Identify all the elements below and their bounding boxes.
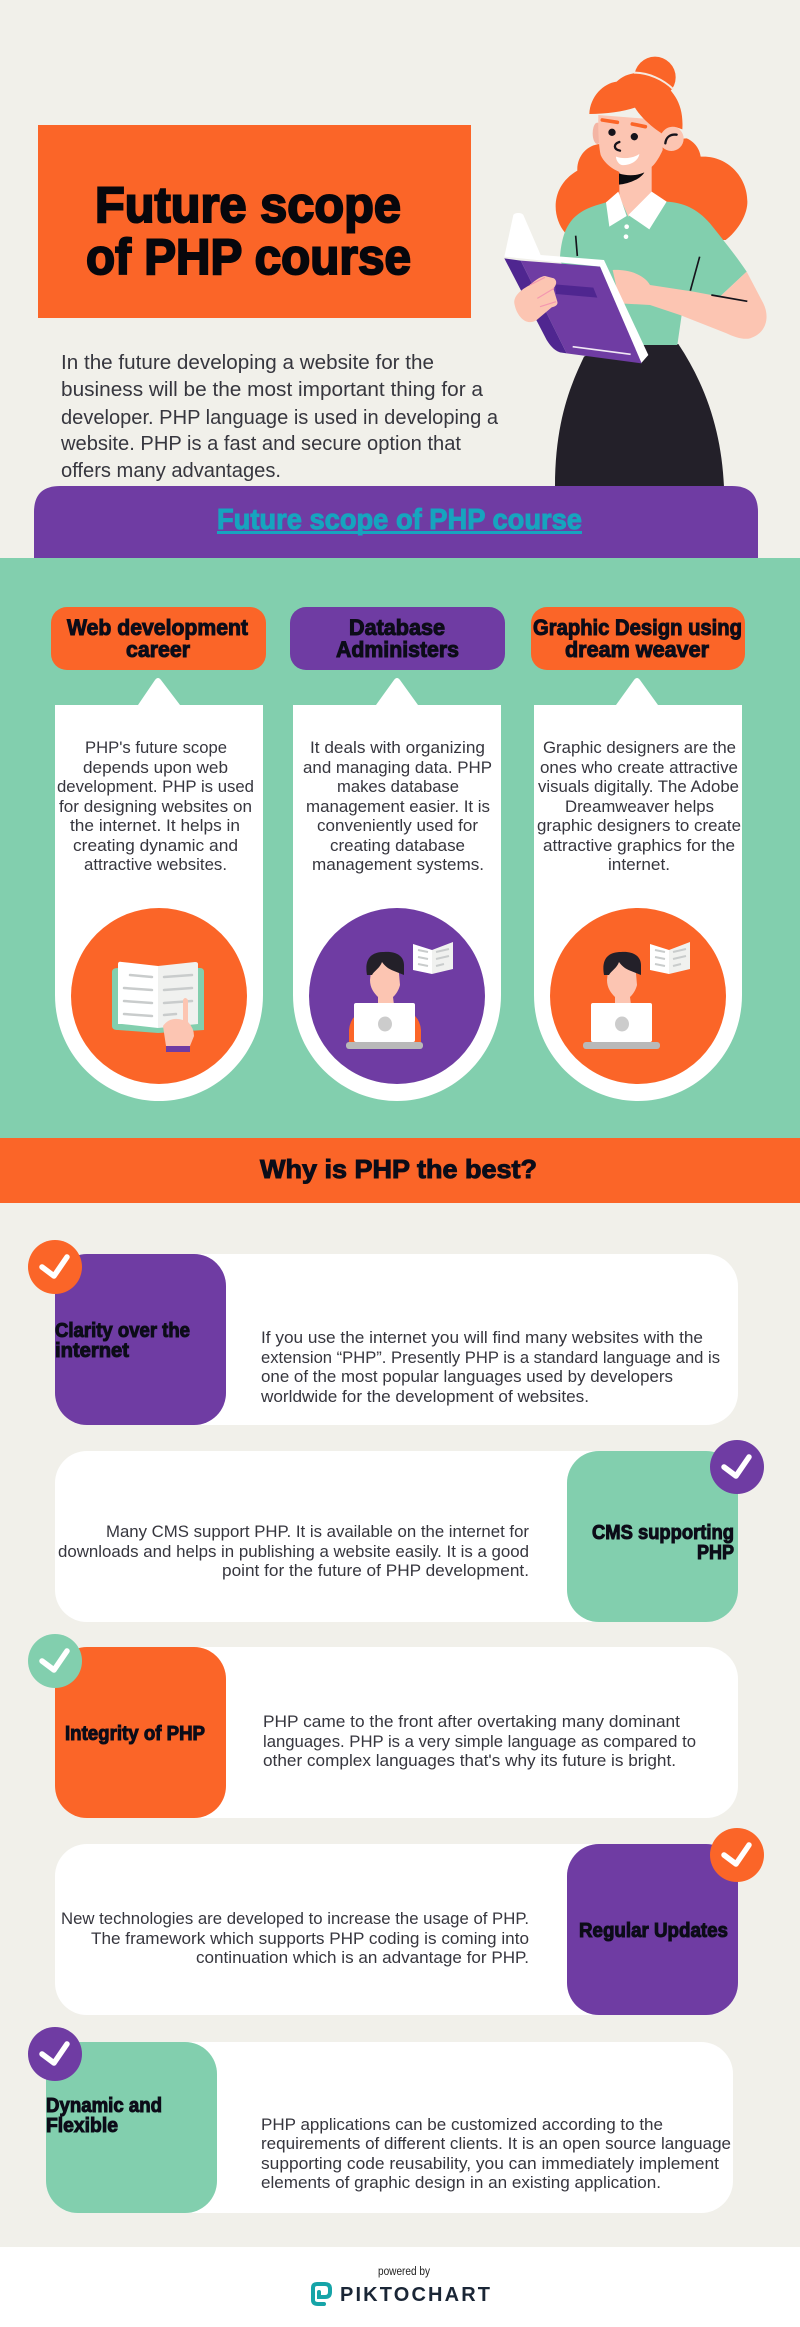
piktochart wordmark: PIKTOCHART [340, 2284, 490, 2306]
block title: Integrity of PHP [65, 1723, 205, 1745]
smile [616, 154, 639, 165]
card text: creating database [330, 836, 465, 855]
row text: other complex languages that's why its future is bright. [263, 1751, 676, 1770]
intro paragraph: offers many advantages. [61, 460, 281, 482]
check badge [28, 2027, 82, 2081]
purple title block [55, 1254, 226, 1425]
pill heading [51, 607, 266, 670]
card text: PHP's future scope [85, 738, 227, 757]
block title [55, 1320, 190, 1362]
row text [263, 1712, 696, 1770]
book cover [521, 261, 642, 363]
row text: If you use the internet you will find many websites with the [261, 1328, 703, 1347]
intro paragraph: In the future developing a website for the [61, 352, 434, 374]
block title: Flexible [46, 2115, 118, 2137]
block title: PHP [697, 1542, 734, 1564]
row: CMS supporting PHP [55, 1440, 764, 1622]
back ear [593, 123, 602, 144]
ear [659, 126, 684, 151]
card text: and managing data. PHP [303, 758, 492, 777]
arm [613, 270, 767, 339]
neck shadow [619, 172, 644, 185]
icon: person at laptop with book [346, 942, 453, 1049]
hair back [556, 138, 747, 240]
hair band [634, 73, 673, 89]
row text [61, 1909, 529, 1967]
sleeve lines [576, 236, 747, 301]
block title: CMS supporting [592, 1522, 734, 1544]
illustration: woman reading a book [504, 57, 767, 487]
orange circle [71, 908, 247, 1084]
orange title block [55, 1647, 226, 1818]
card text: attractive graphics for the [543, 836, 735, 855]
pill heading: Administers [336, 637, 459, 662]
finger lines [530, 277, 556, 307]
card text: attractive websites. [84, 855, 227, 874]
card text: It deals with organizing [310, 738, 485, 757]
eyes [608, 129, 638, 140]
orange band heading [0, 1138, 800, 1203]
white card [293, 678, 501, 1101]
mint title block [567, 1451, 738, 1622]
icon: open book with pointing hand [112, 962, 204, 1052]
neck [619, 167, 652, 217]
card text: the internet. It helps in [70, 816, 240, 835]
row: integrity of PHP [28, 1634, 738, 1818]
purple title block [567, 1844, 738, 2015]
bun [634, 57, 676, 98]
card text: graphic designers to create [537, 816, 741, 835]
hand on book [514, 276, 558, 322]
row text: downloads and helps in publishing a website easily. It is a good [58, 1542, 529, 1561]
nose and ear line [615, 135, 677, 151]
row text: requirements of different clients. It is an open source language [261, 2134, 731, 2153]
intro paragraph: website. PHP is a fast and secure option that [60, 433, 461, 455]
pill heading: career [126, 637, 190, 662]
book pages [504, 213, 648, 363]
row text: The framework which supports PHP coding is coming into [91, 1929, 529, 1948]
mint title block [46, 2042, 217, 2213]
skirt [555, 344, 724, 487]
card text [57, 738, 254, 874]
title text [86, 177, 411, 285]
purple section header [34, 486, 758, 560]
hair top [589, 73, 683, 133]
shirt buttons [624, 224, 629, 239]
pill heading: Database [349, 615, 445, 640]
intro paragraph [60, 352, 499, 482]
intro paragraph: business will be the most important thing for a [61, 379, 484, 401]
section heading: Future scope of PHP course [217, 504, 582, 536]
orange circle [550, 908, 726, 1084]
pill heading [290, 607, 505, 670]
orange band heading: Why is PHP the best? [260, 1154, 537, 1184]
row text: point for the future of PHP development. [222, 1561, 529, 1580]
row: regular updates [55, 1828, 764, 2015]
card text: Dreamweaver helps [565, 797, 714, 816]
check badge [28, 1634, 82, 1688]
pill heading: dream weaver [565, 637, 709, 662]
pill heading: Graphic Design using [533, 615, 742, 640]
footer [0, 2247, 800, 2327]
block title [46, 2095, 162, 2137]
block title [592, 1522, 734, 1564]
title text: of PHP course [86, 229, 411, 285]
row text: PHP applications can be customized according to the [261, 2115, 663, 2134]
row text [261, 2115, 731, 2192]
card text: management easier. It is [306, 797, 490, 816]
book label [555, 284, 597, 298]
icon: person at laptop with book [583, 942, 690, 1049]
card text [537, 738, 741, 874]
block title: Regular Updates [579, 1920, 728, 1942]
row: dynamic and flexible [28, 2027, 733, 2213]
card text: conveniently used for [317, 816, 478, 835]
pill heading [531, 607, 745, 670]
card text: management systems. [312, 855, 484, 874]
piktochart logo icon [313, 2284, 330, 2304]
check badge [710, 1440, 764, 1494]
row text: languages. PHP is a very simple language as compared to [263, 1732, 696, 1751]
collar [606, 192, 667, 229]
shirt [560, 202, 747, 345]
card text: depends upon web [83, 758, 228, 777]
card text: development. PHP is used [57, 777, 254, 796]
card text: creating dynamic and [73, 836, 238, 855]
row: clarity over the internet [28, 1240, 738, 1425]
row text: supporting code reusability, you can immediately implement [261, 2154, 719, 2173]
card text: visuals digitally. The Adobe [538, 777, 739, 796]
eyebrows [602, 120, 645, 127]
column: database administers [290, 607, 505, 1101]
intro paragraph: developer. PHP language is used in developing a [61, 407, 499, 429]
row text: continuation which is an advantage for PHP. [196, 1948, 529, 1967]
card text: for designing websites on [59, 797, 252, 816]
row text: one of the most popular languages used by developers [261, 1367, 673, 1386]
block title: Clarity over the [55, 1320, 190, 1342]
column: web development career [51, 607, 266, 1101]
column: graphic design using dream weaver [531, 607, 745, 1101]
row text [260, 1328, 720, 1406]
card text: internet. [608, 855, 670, 874]
book bottom line [573, 347, 631, 354]
powered by: powered by [378, 2266, 430, 2278]
card text: makes database [337, 777, 459, 796]
card text: Graphic designers are the [543, 738, 736, 757]
row text: worldwide for the development of websites. [260, 1387, 589, 1406]
block title: Dynamic and [46, 2095, 162, 2117]
mint section [0, 558, 800, 1138]
purple circle [309, 908, 485, 1084]
row text: PHP came to the front after overtaking many dominant [263, 1712, 680, 1731]
row text [58, 1522, 529, 1580]
row text: extension “PHP”. Presently PHP is a standard language and is [261, 1348, 720, 1367]
title panel [38, 125, 471, 318]
card text: ones who create attractive [540, 758, 738, 777]
row text: elements of graphic design in an existing application. [261, 2173, 661, 2192]
card text [303, 738, 492, 874]
check badge [28, 1240, 82, 1294]
row text: Many CMS support PHP. It is available on the internet for [106, 1522, 529, 1541]
face [598, 115, 663, 175]
white card [534, 678, 742, 1101]
white card [55, 678, 263, 1101]
row text: New technologies are developed to increase the usage of PHP. [61, 1909, 529, 1928]
pill heading: Web development [67, 615, 249, 640]
check badge [710, 1828, 764, 1882]
title text: Future scope [95, 177, 401, 233]
book spine [504, 258, 567, 353]
block title: internet [55, 1340, 129, 1362]
